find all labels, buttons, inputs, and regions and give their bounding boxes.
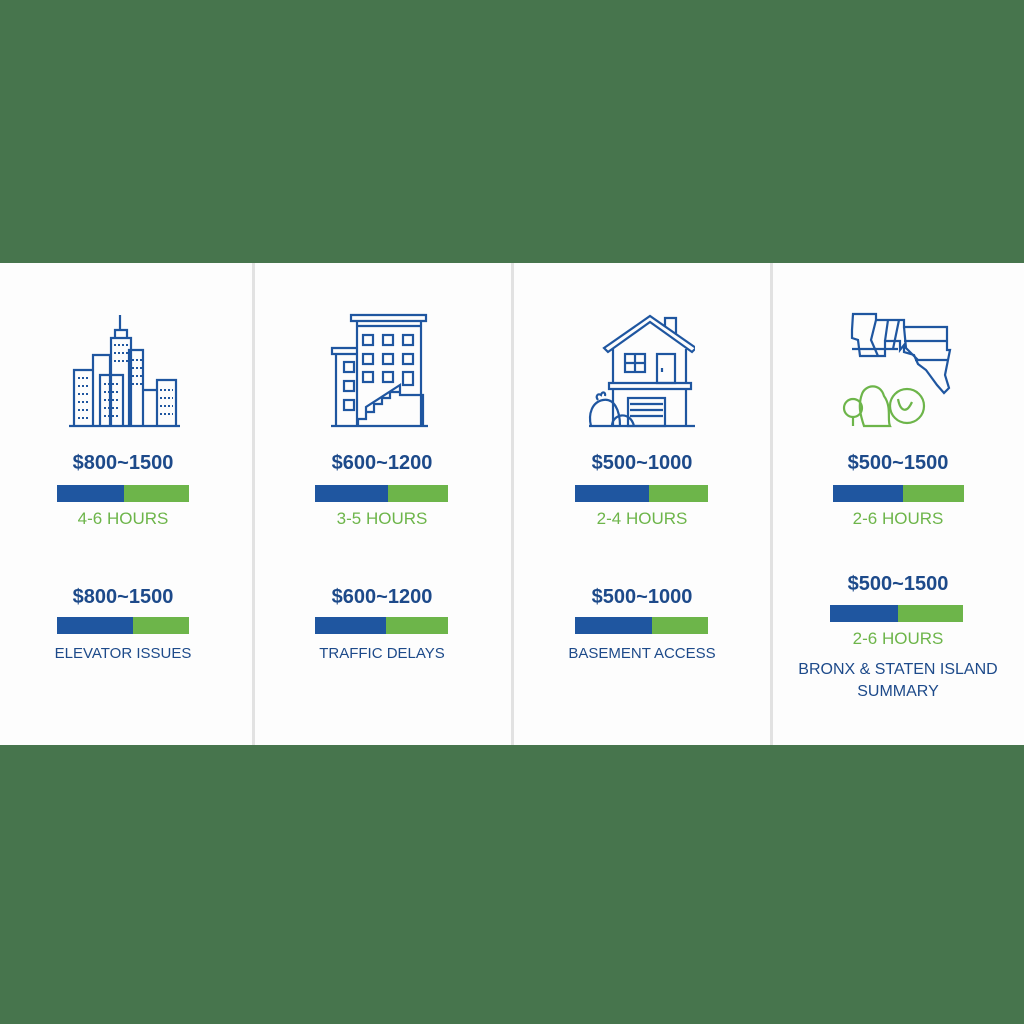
text: BASEMENT ACCESS xyxy=(568,645,716,662)
text: $600~1200 xyxy=(332,452,432,474)
text: 2-6 HOURS xyxy=(853,509,943,528)
icon: apartment building with stairs xyxy=(330,314,428,428)
text: $800~1500 xyxy=(73,586,173,608)
text: SUMMARY xyxy=(857,683,939,700)
text: ELEVATOR ISSUES xyxy=(55,645,191,662)
text: $500~1500 xyxy=(848,452,948,474)
text: $600~1200 xyxy=(332,586,432,608)
text: $800~1500 xyxy=(73,452,173,474)
text: $500~1500 xyxy=(848,573,948,595)
text: BRONX & STATEN ISLAND xyxy=(798,661,998,678)
panel 2 xyxy=(315,452,448,662)
text: 2-4 HOURS xyxy=(597,509,687,528)
panel 4 xyxy=(798,452,998,700)
icon: house with garage xyxy=(588,314,695,428)
text: 3-5 HOURS xyxy=(337,509,427,528)
text: 4-6 HOURS xyxy=(78,509,168,528)
text: $500~1000 xyxy=(592,452,692,474)
white band xyxy=(0,263,1024,745)
icon: map with trees xyxy=(842,312,952,428)
panel 3 xyxy=(568,452,716,662)
text: TRAFFIC DELAYS xyxy=(319,645,445,662)
panel 1 xyxy=(55,452,191,662)
icon: city skyline xyxy=(69,315,180,428)
text: $500~1000 xyxy=(592,586,692,608)
text: 2-6 HOURS xyxy=(853,629,943,648)
